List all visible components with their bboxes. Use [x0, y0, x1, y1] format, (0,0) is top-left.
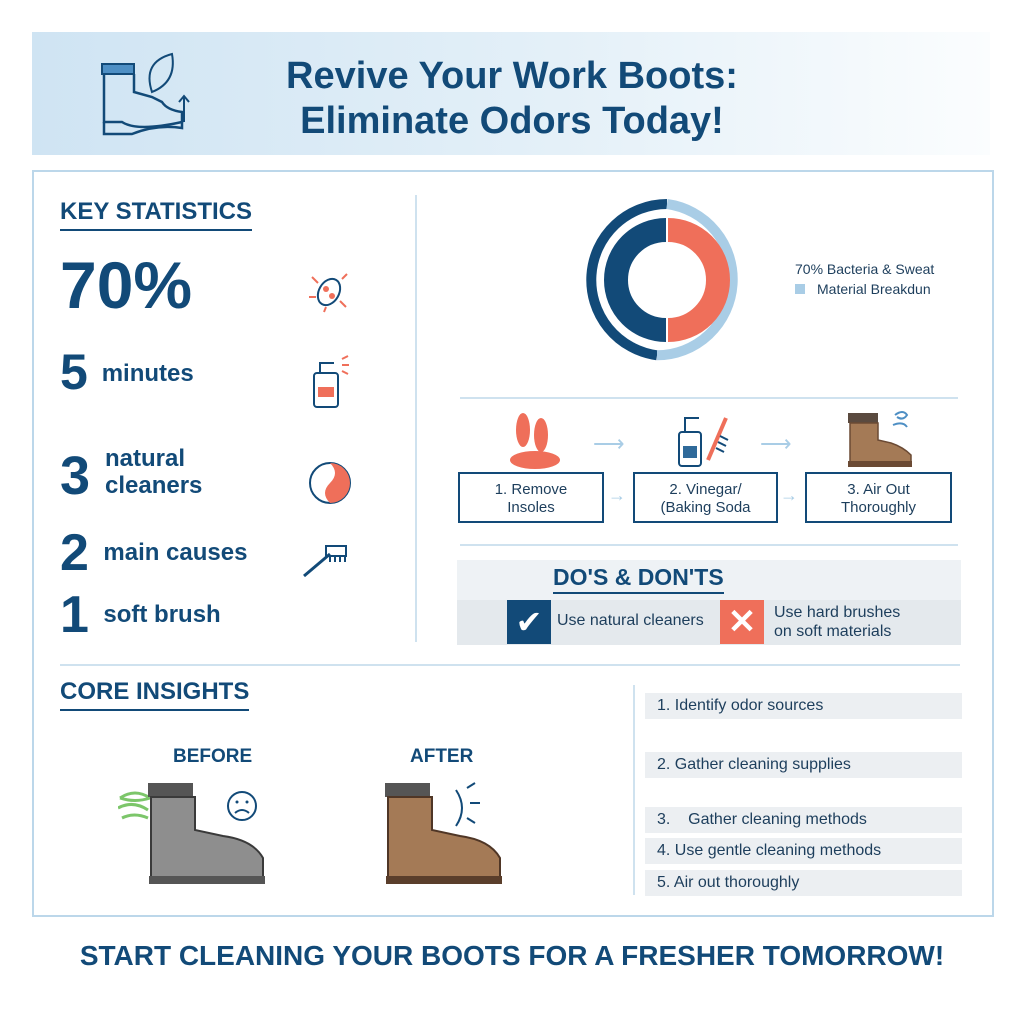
stat 70%: 70%: [60, 248, 192, 322]
before label: BEFORE: [173, 746, 252, 767]
heading: CORE INSIGHTS: [60, 678, 249, 705]
panel: core insights: [60, 678, 502, 884]
legend: 70% Bacteria & Sweat: [795, 261, 934, 277]
after label: AFTER: [410, 746, 473, 767]
arrow: →: [608, 485, 626, 505]
icon: boot with leaf: [101, 52, 190, 136]
don't item: Use hard brushes: [774, 604, 900, 621]
arrow: ⟶: [593, 431, 625, 456]
list: steps: [645, 693, 962, 896]
step 2: [633, 472, 778, 523]
panel: steps: [458, 411, 952, 523]
main panel: [32, 170, 994, 917]
illustration: gray boot: [118, 783, 265, 884]
icon: brown boot: [848, 411, 912, 467]
panel: key statistics: cleaners: [105, 472, 202, 499]
panel: key statistics: natural: [105, 445, 185, 472]
step 3: Thoroughly: [841, 499, 916, 516]
arrow: ⟶: [760, 431, 792, 456]
stat 2 main causes: 2 main causes: [60, 524, 247, 582]
list: steps: 4. Use gentle cleaning methods: [657, 842, 881, 859]
don't item: ✕: [728, 603, 756, 641]
step 1: 1. Remove: [495, 481, 567, 498]
chart: donut: [586, 199, 738, 360]
stat 3 natural cleaners: 3: [60, 446, 90, 506]
header banner: [32, 32, 990, 155]
list: steps: 3. Gather cleaning methods: [657, 811, 867, 828]
step 2: (Baking Soda: [660, 499, 751, 516]
title: Revive Your Work Boots:: [286, 55, 738, 97]
icon: insoles: [510, 413, 560, 469]
step 1: [458, 472, 604, 523]
footer call to action: START CLEANING YOUR BOOTS FOR A FRESHER TOMORROW!: [80, 940, 944, 971]
panel: do's and don'ts: [457, 560, 961, 645]
arrow: →: [780, 485, 798, 505]
stat 5 minutes: 5 minutes: [60, 344, 194, 400]
don't item: [720, 600, 900, 644]
step 1: Insoles: [507, 499, 555, 516]
title: Eliminate Odors Today!: [300, 100, 724, 142]
icon: bacteria: [309, 273, 348, 312]
step 3: 3. Air Out: [847, 481, 910, 498]
do item: [507, 600, 704, 644]
heading: KEY STATISTICS: [60, 198, 252, 225]
don't item: on soft materials: [774, 623, 891, 640]
list: steps: 2. Gather cleaning supplies: [657, 756, 851, 773]
title: [286, 55, 738, 142]
illustration: brown boot: [385, 782, 502, 884]
do item: ✔: [516, 604, 542, 640]
do item: Use natural cleaners: [557, 612, 704, 629]
icon: half circle: [309, 462, 351, 504]
icon: spray and brush: [678, 417, 728, 467]
step 2: 2. Vinegar/: [669, 481, 742, 498]
icon: brush: [303, 545, 347, 578]
legend: [795, 261, 934, 297]
list: steps: 1. Identify odor sources: [657, 697, 823, 714]
step 3: [805, 472, 952, 523]
panel: key statistics: [60, 198, 351, 644]
stat 1 soft brush: 1 soft brush: [60, 586, 221, 644]
list: steps: 5. Air out thoroughly: [657, 874, 799, 891]
icon: spray bottle: [313, 355, 349, 408]
heading: DO'S & DON'TS: [553, 564, 724, 590]
legend: Material Breakdun: [817, 281, 931, 297]
